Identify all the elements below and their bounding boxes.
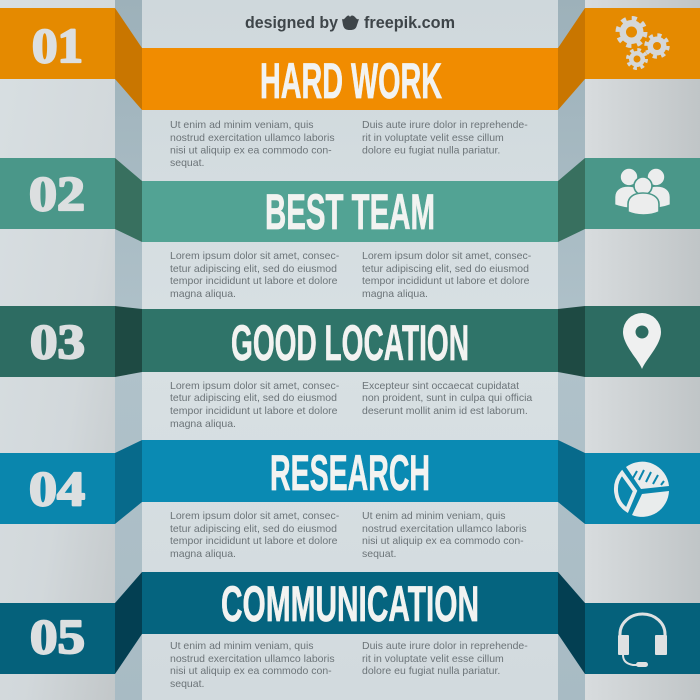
panel: good location: [0, 306, 700, 430]
left fold 04: [115, 440, 142, 524]
text: good location right: non proident, sunt in culpa qui officia: [362, 392, 532, 404]
text: hard work left: nostrud exercitation ullamco laboris: [170, 132, 335, 144]
text: communication left: sequat.: [170, 678, 204, 690]
text: best team left: magna aliqua.: [170, 288, 236, 300]
icon: gears: [618, 18, 668, 68]
right fold 03: [558, 306, 585, 377]
right band 05: [585, 603, 700, 674]
text: hard work left: nisi ut aliquip ex ea commodo con-: [170, 144, 332, 156]
number 02: 02: [29, 166, 85, 221]
left band 01: [0, 8, 115, 79]
text: research left: tetur adipiscing elit, sed do eiusmod: [170, 523, 337, 535]
right band 02: [585, 158, 700, 229]
left band 04: [0, 453, 115, 524]
left fold 05: [115, 572, 142, 674]
panel: hard work: [0, 8, 700, 169]
left fold 01: [115, 8, 142, 110]
center band: hard work: [142, 48, 558, 110]
number 04: 04: [29, 461, 85, 516]
text: communication right: rit in voluptate velit esse cillum: [362, 653, 504, 665]
text: best team right: Lorem ipsum dolor sit amet, consec-: [362, 250, 532, 262]
right fold 04: [558, 440, 585, 524]
number 01: 01: [32, 18, 83, 73]
right fold 01: [558, 8, 585, 110]
right band 04: [585, 453, 700, 524]
right band 01: [585, 8, 700, 79]
icon: map pin: [623, 313, 661, 369]
text: hard work right: rit in voluptate velit esse cillum: [362, 132, 504, 144]
text: communication left: Ut enim ad minim veniam, quis: [170, 640, 314, 652]
center band: communication: [142, 572, 558, 634]
text: communication left: nisi ut aliquip ex ea commodo con-: [170, 665, 332, 677]
icon: team: [614, 168, 670, 215]
text: best team left: tempor incididunt ut labore et dolore: [170, 275, 338, 287]
logo: designed by freepik: freepik.com: [364, 13, 455, 32]
heading: research: RESEARCH: [270, 445, 430, 501]
text: research right: nisi ut aliquip ex ea commodo con-: [362, 535, 524, 547]
text: research left: magna aliqua.: [170, 548, 236, 560]
logo: designed by freepik: [245, 13, 455, 32]
text: good location left: tempor incididunt ut labore et dolore: [170, 405, 338, 417]
text: hard work left: sequat.: [170, 157, 204, 169]
center band: research: [142, 440, 558, 502]
left fold 03: [115, 306, 142, 377]
text: good location left: magna aliqua.: [170, 418, 236, 430]
text: research right: sequat.: [362, 548, 396, 560]
text: hard work right: Duis aute irure dolor in reprehende-: [362, 119, 528, 131]
text: hard work left: Ut enim ad minim veniam, quis: [170, 119, 314, 131]
text: best team right: tetur adipiscing elit, sed do eiusmod: [362, 263, 529, 275]
text: research right: Ut enim ad minim veniam, quis: [362, 510, 506, 522]
left fold 02: [115, 158, 142, 242]
icon: headset: [618, 614, 667, 667]
text: best team right: magna aliqua.: [362, 288, 428, 300]
text: good location left: Lorem ipsum dolor sit amet, consec-: [170, 380, 340, 392]
text: communication right: Duis aute irure dolor in reprehende-: [362, 640, 528, 652]
heading: hard work: HARD WORK: [260, 53, 442, 109]
right band 03: [585, 306, 700, 377]
panel: research: [0, 440, 700, 560]
text: research left: tempor incididunt ut labore et dolore: [170, 535, 338, 547]
center band: best team: [142, 181, 558, 242]
text: good location left: tetur adipiscing elit, sed do eiusmod: [170, 392, 337, 404]
panel: communication: [0, 572, 700, 690]
text: hard work right: dolore eu fugiat nulla pariatur.: [362, 144, 500, 156]
number 03: 03: [30, 314, 85, 369]
left band 03: [0, 306, 115, 377]
text: best team right: tempor incididunt ut labore et dolore: [362, 275, 530, 287]
heading: good location: GOOD LOCATION: [231, 315, 469, 371]
text: best team left: Lorem ipsum dolor sit amet, consec-: [170, 250, 340, 262]
text: communication left: nostrud exercitation ullamco laboris: [170, 653, 335, 665]
right fold 02: [558, 158, 585, 242]
right fold 05: [558, 572, 585, 674]
text: best team left: tetur adipiscing elit, sed do eiusmod: [170, 263, 337, 275]
left band 02: [0, 158, 115, 229]
text: research left: Lorem ipsum dolor sit amet, consec-: [170, 510, 340, 522]
heading: communication: COMMUNICATION: [221, 576, 479, 632]
icon: pie chart: [616, 462, 669, 517]
logo: designed by freepik: designed by: [245, 13, 339, 32]
left band 05: [0, 603, 115, 674]
heading: best team: BEST TEAM: [265, 184, 435, 240]
center band: good location: [142, 309, 558, 372]
panel: best team: [0, 158, 700, 300]
text: research right: nostrud exercitation ullamco laboris: [362, 523, 527, 535]
number 05: 05: [30, 609, 85, 664]
text: good location right: deserunt mollit anim id est laborum.: [362, 405, 528, 417]
text: communication right: dolore eu fugiat nulla pariatur.: [362, 665, 500, 677]
text: good location right: Excepteur sint occaecat cupidatat: [362, 380, 519, 392]
